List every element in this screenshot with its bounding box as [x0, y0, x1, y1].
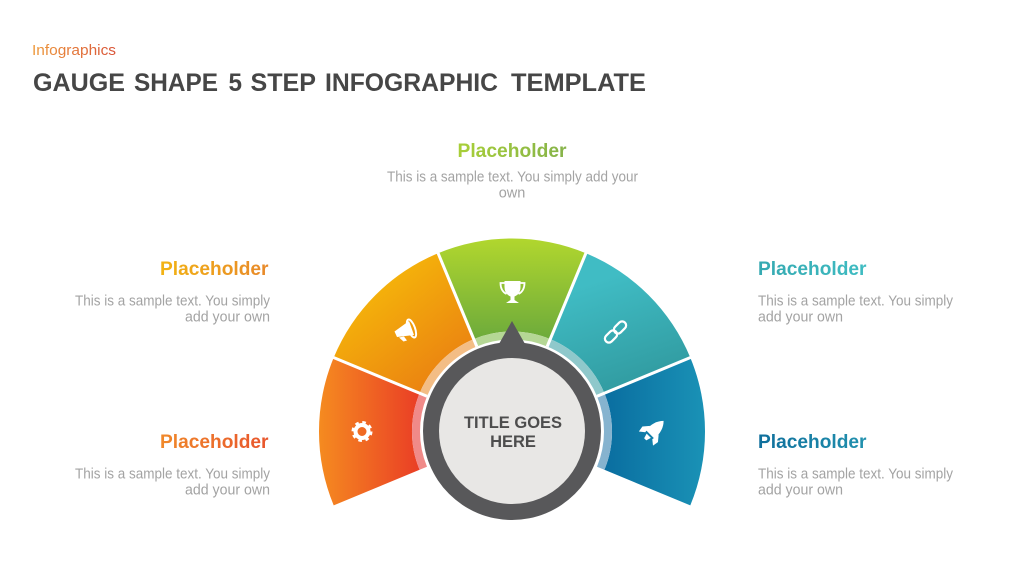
text block: upper left orange: This is a sample text. You simply [75, 294, 271, 310]
text block: upper right teal: add your own [758, 310, 843, 326]
text block: upper left orange: add your own [185, 310, 270, 326]
text block: lower left red: This is a sample text. You simply [75, 466, 271, 482]
segment: teal step [547, 253, 690, 396]
title: GAUGE [33, 69, 125, 97]
title: INFOGRAPHIC [325, 69, 498, 97]
segment: red step [319, 358, 427, 505]
center dial [423, 342, 601, 520]
title: TEMPLATE [511, 69, 646, 97]
text block: upper left orange [75, 259, 271, 326]
text block: top green: Placeholder [458, 141, 567, 162]
text block: lower left red: add your own [185, 482, 270, 498]
icon: rocket [637, 413, 671, 447]
text block: upper left orange: Placeholder [160, 259, 269, 280]
icon: link [603, 320, 628, 344]
center title: HERE [490, 433, 536, 451]
gauge chart [319, 238, 705, 520]
text block: top green: own [499, 186, 525, 202]
segment: blue step [597, 358, 705, 505]
title [33, 69, 646, 97]
center title: TITLE GOES [464, 414, 562, 432]
title: STEP [250, 69, 316, 97]
text block: upper right teal: This is a sample text. You simply [758, 294, 954, 310]
text block: lower right blue: Placeholder [758, 432, 867, 453]
title: 5 [228, 69, 242, 97]
text block: upper right teal: Placeholder [758, 259, 867, 280]
segment: green step [438, 238, 586, 346]
text block: lower right blue [758, 432, 954, 498]
icon: gear [353, 422, 371, 440]
title: SHAPE [134, 69, 218, 97]
icon: trophy [500, 281, 524, 303]
pointer [495, 321, 529, 351]
segment: orange step [334, 253, 477, 396]
eyebrow label: Infographics [32, 42, 116, 59]
text block: lower right blue: This is a sample text. You simply [758, 466, 954, 482]
text block: lower left red [75, 432, 271, 498]
text block: upper right teal [758, 259, 954, 326]
text block: top green [387, 141, 638, 202]
text block: lower right blue: add your own [758, 482, 843, 498]
text block: top green: This is a sample text. You simply add your [387, 170, 638, 186]
text block: lower left red: Placeholder [160, 432, 269, 453]
icon: megaphone [394, 318, 418, 342]
